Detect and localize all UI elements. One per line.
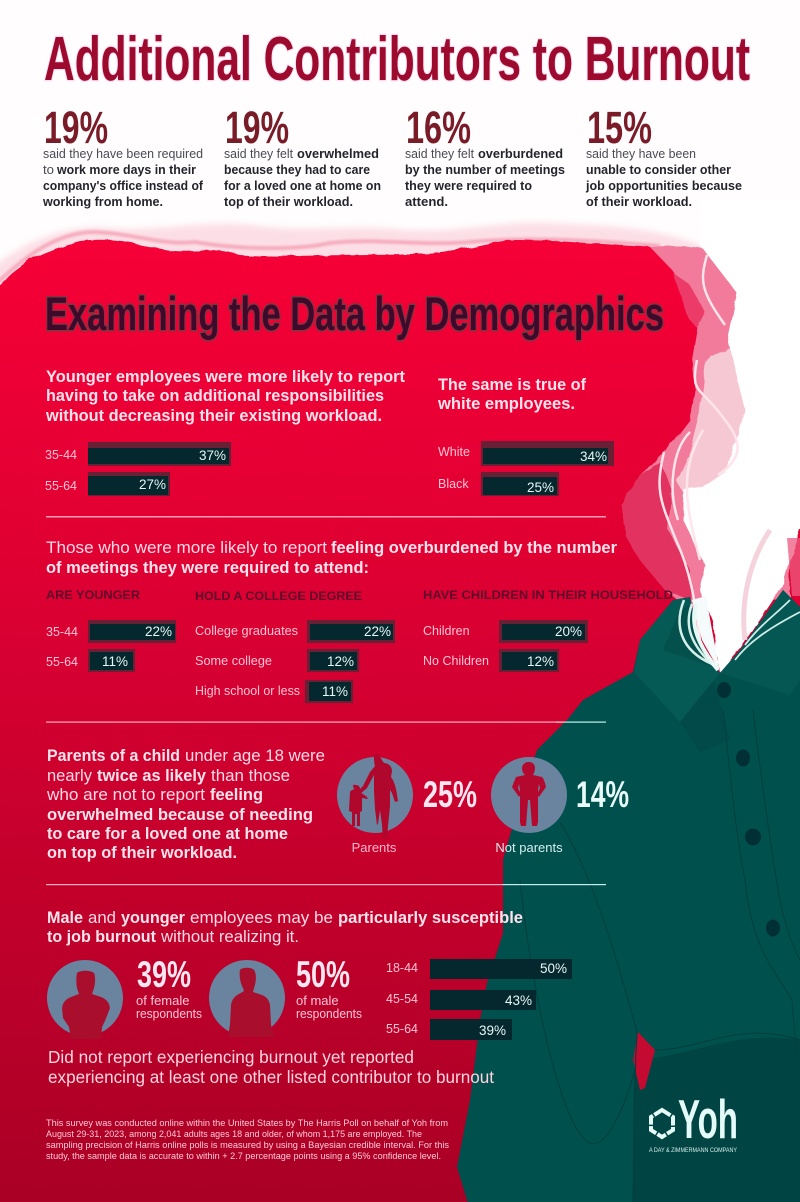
footnote: study, the sample data is accurate to within + 2.7 percentage points using a 95% confidence level. xyxy=(46,1151,441,1162)
stat: work more days in office: company's office instead of xyxy=(43,178,204,193)
text: parents of a child: Parents of a child xyxy=(47,746,180,765)
jacket collar left xyxy=(634,597,720,722)
logo: Yoh xyxy=(649,1088,738,1154)
footnote: August 29-31, 2023, among 2,041 adults ages 18 and older, of whom 1,175 are employed. The xyxy=(46,1129,422,1140)
subheading: hold a college degree: HOLD A COLLEGE DEGREE xyxy=(195,589,362,603)
bar chart: meetings by age xyxy=(46,620,176,672)
text: parents of a child: under age 18 were xyxy=(185,746,325,765)
bar chart: race: 34% xyxy=(580,449,607,464)
icon: male respondent xyxy=(209,960,285,1037)
bar chart: meetings by education: High school or less xyxy=(195,684,300,698)
text: overburdened by meetings: of meetings they were required to attend: xyxy=(46,558,369,577)
icon: female respondent xyxy=(47,960,123,1039)
bar chart: meetings by children: Children xyxy=(423,624,470,638)
stat: overburdened by meetings xyxy=(405,102,565,209)
stat: caring for a loved one: 19% xyxy=(225,102,289,153)
stat: 39% of female respondents xyxy=(136,954,202,1021)
stat: caring for a loved one: said they felt xyxy=(224,146,293,161)
text: male and younger employees: without realizing it. xyxy=(160,927,299,946)
jacket buttons xyxy=(717,682,780,936)
logo: Yoh: A DAY & ZIMMERMANN COMPANY xyxy=(649,1148,737,1154)
stat: work more days in office xyxy=(42,102,204,209)
stat: 50% of male respondents xyxy=(296,954,362,1021)
subheading: have children: HAVE CHILDREN IN THEIR HOUSEHOLD xyxy=(423,588,673,602)
red gap between arm and body xyxy=(633,1032,655,1090)
background: pink haze above the paint edge xyxy=(0,222,800,400)
bar chart: meetings by education: Some college xyxy=(195,654,272,668)
footnote xyxy=(46,1118,449,1162)
text: parents of a child: to care for a loved one at home xyxy=(47,824,288,843)
stat: overburdened by meetings: 16% xyxy=(406,102,471,153)
bar chart: meetings by children: No Children xyxy=(423,654,489,668)
bar chart: meetings by education: 12% xyxy=(327,654,354,669)
text: overburdened by meetings: Those who were more likely to report xyxy=(46,538,327,557)
footnote: This survey was conducted online within the United States by The Harris Poll on behalf of Yoh from xyxy=(46,1118,448,1129)
jacket collar right xyxy=(720,590,800,695)
text: male and younger employees: younger xyxy=(121,908,185,927)
bar chart: burnout by age: 39% xyxy=(479,1023,506,1038)
text: male and younger employees: Male xyxy=(47,908,83,927)
text: parents of a child: than those xyxy=(211,766,290,785)
icon: parent and child xyxy=(337,754,413,839)
bar chart: burnout by age: 43% xyxy=(505,993,532,1008)
bar chart: race: 25% xyxy=(527,480,554,495)
jacket lower darker panel xyxy=(632,1038,800,1202)
text: parents of a child xyxy=(46,746,325,862)
stat: 39% of female respondents: 39% xyxy=(137,954,191,995)
bar chart: meetings by age: 55-64 xyxy=(46,655,78,669)
stat: unable to consider other jobs: unable to consider other xyxy=(586,162,731,177)
stat: 50% of male respondents: of male xyxy=(296,993,339,1008)
stat: unable to consider other jobs: 15% xyxy=(587,102,652,153)
stat: 39% of female respondents: of female xyxy=(136,993,189,1008)
text: white employees xyxy=(437,375,586,413)
bar chart: burnout by age: 55-64 xyxy=(386,1022,418,1036)
stat: work more days in office: working from home. xyxy=(42,194,163,209)
text: parents of a child: overwhelmed because of needing xyxy=(47,805,313,824)
jacket figure xyxy=(457,590,800,1202)
stat: overburdened by meetings: overburdened xyxy=(478,146,563,161)
bar chart: meetings by age: 11% xyxy=(102,654,128,669)
logo: Yoh: Yoh xyxy=(678,1088,738,1150)
stat: caring for a loved one: because they had to care xyxy=(224,162,370,177)
stat: caring for a loved one: top of their workload. xyxy=(224,194,353,209)
text: male and younger employees: to job burnout xyxy=(47,927,156,946)
bar chart: burnout by age: 18-44 xyxy=(386,961,418,975)
bar chart: meetings by age: 22% xyxy=(145,624,172,639)
bar chart: meetings by children xyxy=(423,620,588,672)
stat: overburdened by meetings: attend. xyxy=(405,194,448,209)
text: parents of a child: twice as likely xyxy=(97,766,207,785)
bar chart: meetings by age: 35-44 xyxy=(46,625,78,639)
smoke strands over the collar xyxy=(680,596,800,672)
text: younger employees: Younger employees were more likely to report xyxy=(46,367,405,386)
stat: parents 25%: 25% xyxy=(423,774,477,815)
stat: caring for a loved one xyxy=(224,102,381,209)
footnote: sampling precision of Harris online polls is measured by using a Bayesian credible interval. For this xyxy=(46,1140,449,1151)
bar chart: meetings by education: 22% xyxy=(364,624,391,639)
icon: adult not a parent xyxy=(491,757,567,833)
bar chart: meetings by education xyxy=(195,620,395,703)
stat: overburdened by meetings: said they felt xyxy=(405,146,474,161)
stat: unable to consider other jobs: of their workload. xyxy=(586,194,692,209)
bar chart: age, additional responsibilities: 35-44 xyxy=(45,448,77,462)
text: did not report burnout: experiencing at least one other listed contributor to burnout xyxy=(48,1067,494,1087)
bar chart: age, additional responsibilities xyxy=(45,442,231,496)
stat: work more days in office: work more days in their xyxy=(56,162,196,177)
text: white employees: white employees. xyxy=(437,394,575,413)
bar chart: age, additional responsibilities: 27% xyxy=(139,477,166,492)
stat: 50% of male respondents: 50% xyxy=(296,954,350,995)
text: parents of a child: feeling xyxy=(210,785,263,804)
text: white employees: The same is true of xyxy=(438,375,586,394)
stat: overburdened by meetings: they were required to xyxy=(405,178,532,193)
text: parents of a child: nearly xyxy=(47,766,92,785)
text: overburdened by meetings xyxy=(46,538,617,577)
text: parents of a child: who are not to report xyxy=(46,785,205,804)
text: younger employees: without decreasing their existing workload. xyxy=(45,406,382,425)
stat: caring for a loved one: overwhelmed xyxy=(297,146,379,161)
label: not parents: Not parents xyxy=(495,840,563,855)
stat: work more days in office: said they have been required xyxy=(43,146,203,161)
bar chart: race xyxy=(438,441,614,496)
stat: 50% of male respondents: respondents xyxy=(296,1006,362,1021)
bar chart: meetings by children: 12% xyxy=(527,654,554,669)
text: male and younger employees: employees may be xyxy=(190,908,333,927)
subheading: are younger: ARE YOUNGER xyxy=(46,588,140,602)
bar chart: meetings by children: 20% xyxy=(555,624,582,639)
text: parents of a child: on top of their workload. xyxy=(47,843,237,862)
text: overburdened by meetings: feeling overburdened by the number xyxy=(331,538,617,557)
label: parents: Parents xyxy=(352,840,397,855)
text: male and younger employees xyxy=(47,908,523,946)
stat: work more days in office: 19% xyxy=(44,102,108,153)
text: male and younger employees: and xyxy=(88,908,116,927)
stat: unable to consider other jobs xyxy=(585,102,742,209)
text: younger employees xyxy=(45,367,405,425)
bar chart: meetings by education: College graduates xyxy=(195,624,298,638)
bar chart: race: Black xyxy=(438,477,469,491)
stat: not parents 14%: 14% xyxy=(576,774,629,815)
bar chart: burnout by age: 50% xyxy=(540,961,567,976)
text: did not report burnout: Did not report experiencing burnout yet reported xyxy=(48,1047,414,1067)
stat: 39% of female respondents: respondents xyxy=(136,1006,202,1021)
stat: work more days in office: to xyxy=(43,162,54,177)
stat: caring for a loved one: for a loved one at home on xyxy=(224,178,381,193)
bar chart: age, additional responsibilities: 37% xyxy=(199,448,226,463)
bar chart: age, additional responsibilities: 55-64 xyxy=(45,479,77,493)
text: did not report burnout xyxy=(48,1047,494,1087)
bar chart: meetings by education: 11% xyxy=(322,684,348,699)
smoke rising from the collar xyxy=(622,200,800,673)
stat: unable to consider other jobs: job opportunities because xyxy=(585,178,742,193)
bar chart: burnout by age: 45-54 xyxy=(386,992,418,1006)
bar chart: race: White xyxy=(438,445,470,459)
text: younger employees: having to take on additional responsibilities xyxy=(46,386,384,405)
stat: overburdened by meetings: by the number of meetings xyxy=(405,162,565,177)
text: male and younger employees: particularly susceptible xyxy=(338,908,523,927)
bar chart: burnout by age xyxy=(386,959,572,1040)
stat: unable to consider other jobs: said they have been xyxy=(586,146,696,161)
